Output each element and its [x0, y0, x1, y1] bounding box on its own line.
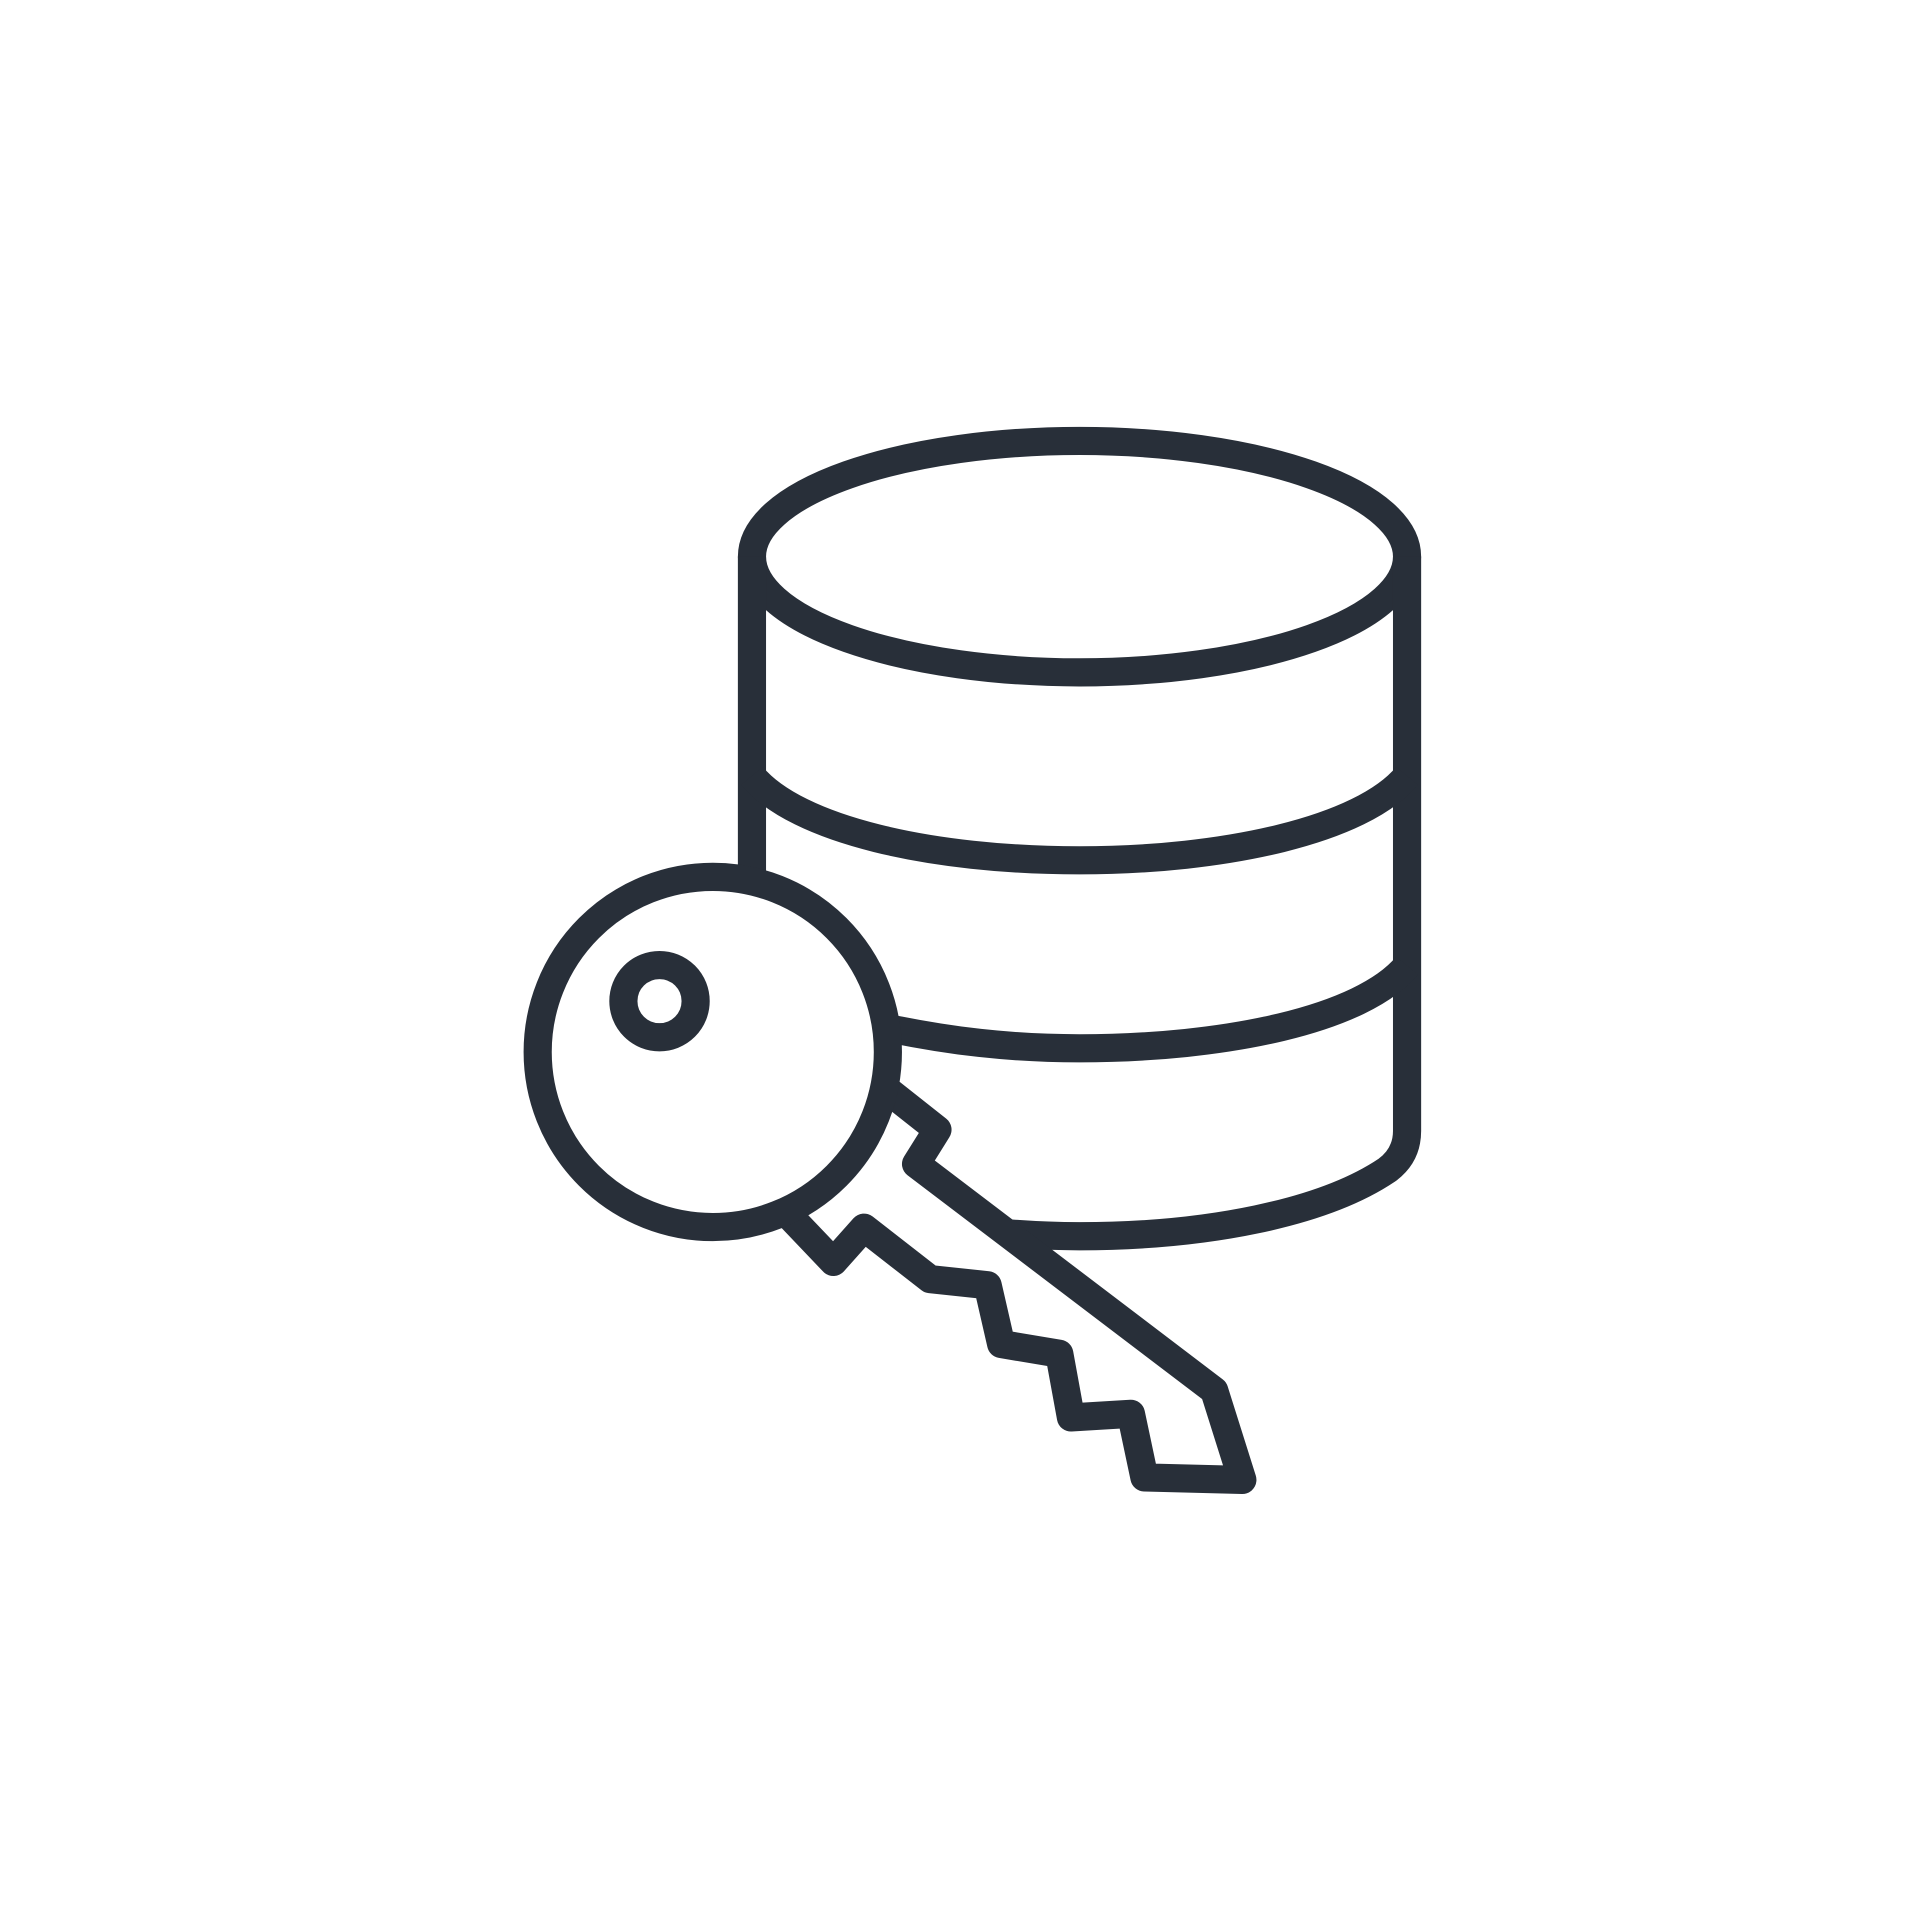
key bow — [538, 877, 888, 1227]
cylinder right side and bottom edge — [999, 557, 1407, 1236]
upper disk band — [752, 776, 1407, 860]
key blade — [784, 1088, 1242, 1480]
cylinder left side — [740, 557, 763, 895]
cylinder top ellipse — [752, 441, 1407, 672]
lower disk band — [876, 966, 1407, 1048]
key bow hole — [623, 965, 696, 1037]
database cylinder — [752, 441, 1407, 1236]
